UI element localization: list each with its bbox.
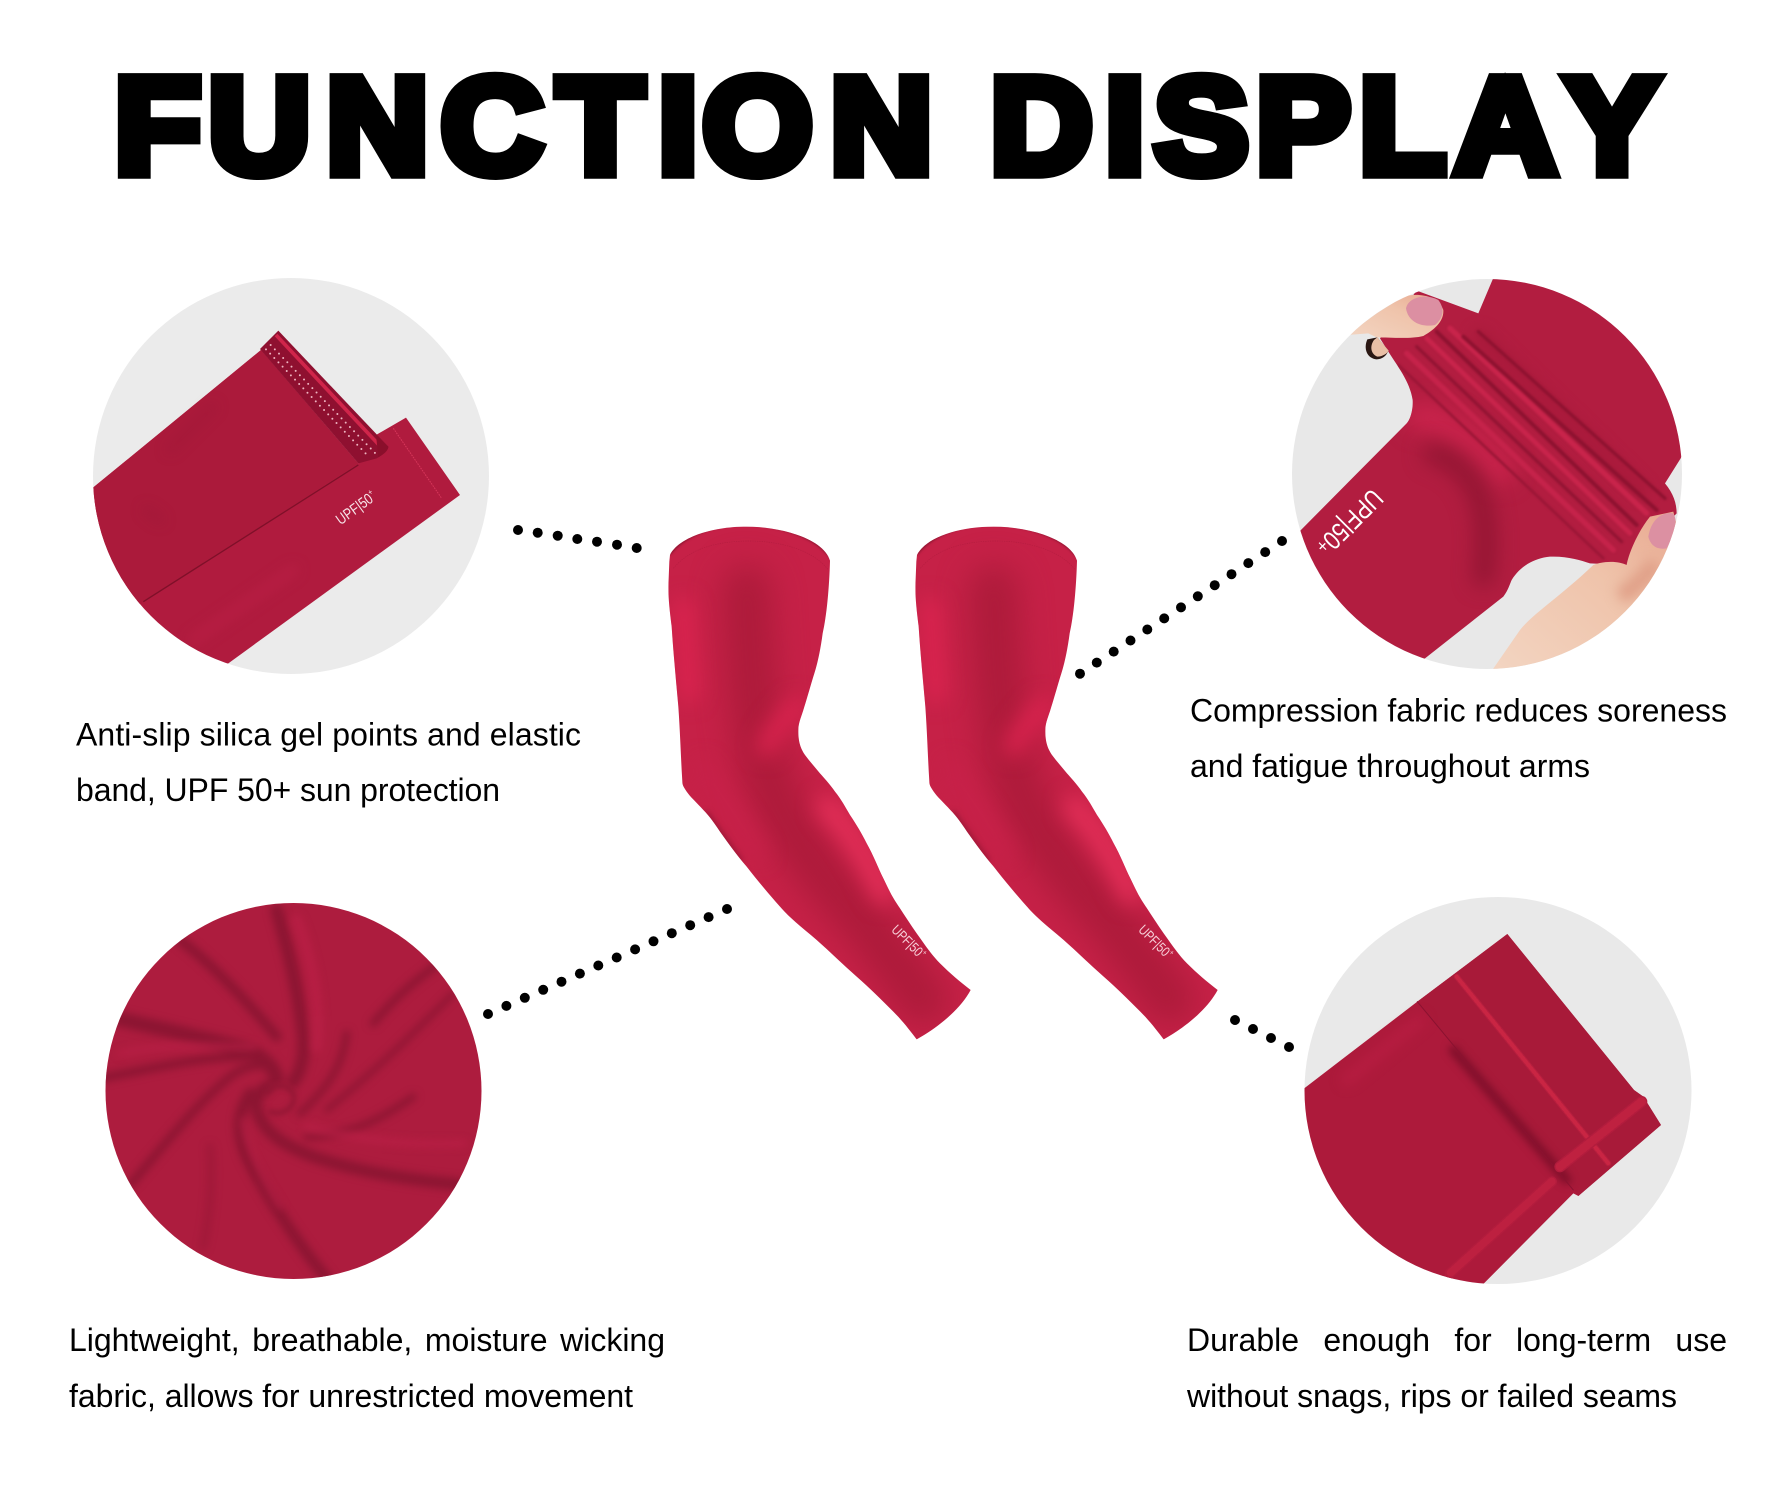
product: left arm sleeve bbox=[668, 526, 970, 1040]
text: silica gel caption: Anti-slip silica gel points and elastic bbox=[76, 716, 581, 752]
panel: swirled fabric detail bbox=[100, 903, 481, 1279]
UPF label: UPF|50 bbox=[1135, 922, 1173, 960]
UPF label: + bbox=[366, 487, 375, 497]
nail top bbox=[1406, 297, 1442, 326]
panel: seam detail bbox=[1293, 897, 1692, 1313]
fold seam bbox=[143, 465, 358, 602]
UPF label: + bbox=[1167, 948, 1177, 957]
silicone band bbox=[260, 331, 388, 463]
panel: compression fabric detail bbox=[1280, 270, 1700, 683]
dotted connector: bottom left bbox=[483, 904, 732, 1019]
stitching bbox=[1457, 977, 1608, 1163]
fingers top bbox=[1347, 295, 1443, 359]
hem stitching bbox=[393, 428, 442, 498]
text: lightweight caption: fabric, allows for unrestricted movement bbox=[69, 1378, 633, 1414]
UPF label: + bbox=[920, 948, 930, 957]
text: durability caption: Durable enough for long-term use bbox=[1187, 1322, 1727, 1358]
title: FUNCTION DISPLAY bbox=[115, 50, 1659, 202]
upper fabric panel bbox=[93, 350, 358, 604]
UPF label: UPF|50 bbox=[332, 489, 376, 528]
panel: silica gel band detail bbox=[80, 278, 489, 683]
thumb bottom bbox=[1490, 512, 1681, 673]
text: silica gel caption bbox=[76, 716, 581, 808]
text: durability caption bbox=[1186, 1322, 1727, 1414]
text: compression caption: Compression fabric reduces soreness bbox=[1190, 692, 1727, 728]
dotted connector: top right bbox=[1075, 536, 1287, 679]
stretched fabric bbox=[1300, 279, 1682, 659]
sleeve body bbox=[80, 350, 460, 683]
nail bottom bbox=[1648, 513, 1675, 549]
UPF label large: UPF|50+ bbox=[1310, 483, 1388, 561]
text: lightweight caption: Lightweight, breathable, moisture wicking bbox=[69, 1322, 665, 1358]
product: right arm sleeve bbox=[915, 526, 1218, 1040]
cuff fold bbox=[1417, 934, 1661, 1196]
text: compression caption: and fatigue throughout arms bbox=[1190, 748, 1590, 784]
text: compression caption bbox=[1190, 692, 1727, 784]
fabric fold shadows bbox=[100, 910, 463, 1278]
sleeve body bbox=[1304, 934, 1661, 1284]
UPF label: UPF|50 bbox=[888, 922, 926, 960]
text: durability caption: without snags, rips or failed seams bbox=[1186, 1378, 1677, 1414]
text: lightweight caption bbox=[69, 1322, 665, 1414]
dotted connector: bottom right bbox=[1230, 1015, 1294, 1052]
text: silica gel caption: band, UPF 50+ sun protection bbox=[76, 772, 500, 808]
fold shadow bbox=[1453, 1050, 1567, 1180]
dotted connector: top left bbox=[513, 525, 642, 553]
